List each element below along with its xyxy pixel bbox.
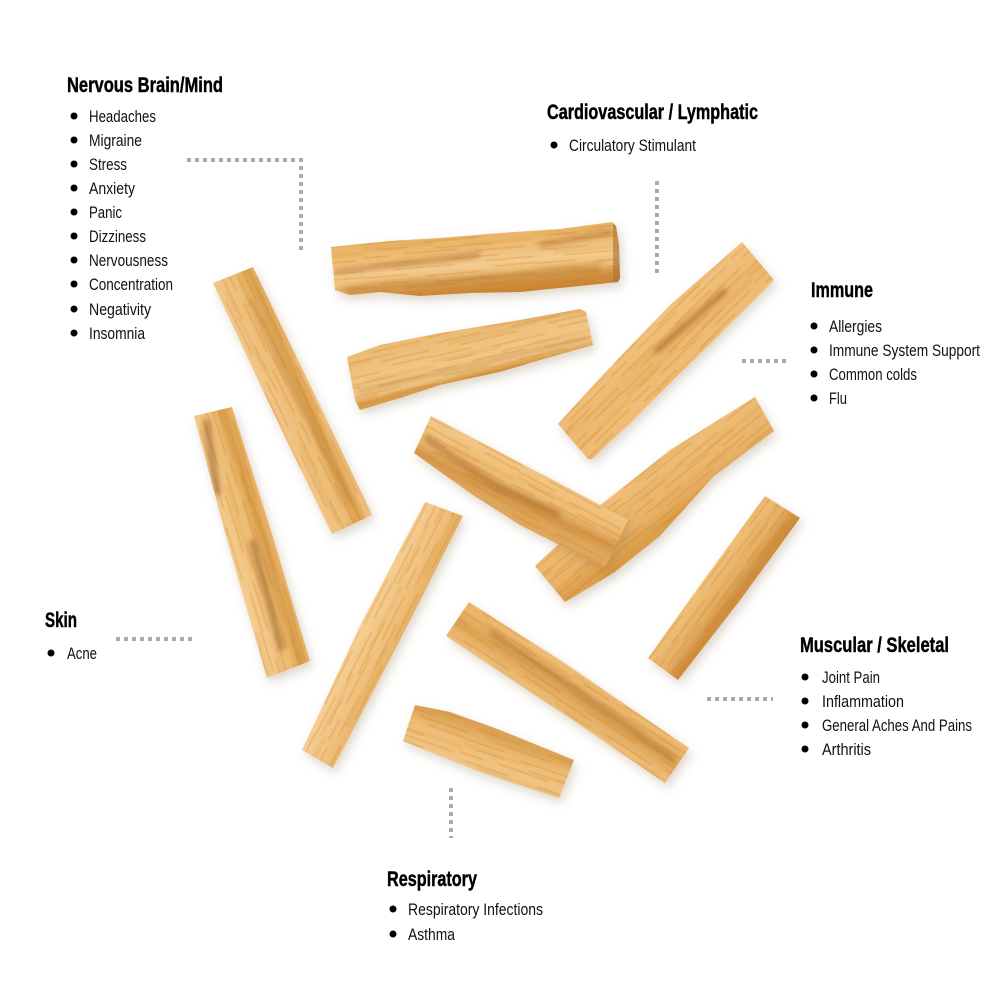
- panel: cardiovascular: [547, 101, 758, 155]
- list: immune: [810, 317, 980, 408]
- list: nervous: Migraine: [89, 131, 142, 150]
- list: nervous: Concentration: [89, 275, 173, 294]
- stick: far right: [640, 490, 805, 685]
- list: cardiovascular: Circulatory Stimulant: [569, 136, 696, 155]
- list: nervous: Nervousness: [89, 251, 168, 270]
- panel: respiratory: [387, 868, 543, 944]
- list: nervous: Panic: [89, 203, 122, 222]
- list: respiratory: Respiratory Infections: [408, 900, 543, 919]
- stick: centre long: [295, 495, 470, 775]
- stick: bottom: [398, 700, 578, 802]
- list: respiratory: [390, 900, 543, 944]
- list: immune: Allergies: [829, 317, 882, 336]
- connector: respiratory: [449, 788, 453, 838]
- heading: cardiovascular: Cardiovascular / Lymphatic: [547, 101, 758, 124]
- connector: skin: [116, 637, 196, 641]
- list: immune: Common colds: [829, 365, 917, 384]
- stick: lower left: [190, 400, 315, 685]
- heading: immune: Immune: [811, 279, 873, 302]
- list: nervous: [70, 107, 173, 343]
- connector: immune: [742, 359, 786, 363]
- heading: respiratory: Respiratory: [387, 868, 477, 891]
- heading: skin: Skin: [45, 609, 77, 632]
- list: nervous: Negativity: [89, 300, 151, 319]
- list: immune: Flu: [829, 389, 847, 408]
- stick: lower right: [440, 595, 695, 790]
- heading: nervous: Nervous Brain/Mind: [67, 74, 223, 97]
- panel: nervous brain/mind: [67, 74, 223, 343]
- list: muscular: Joint Pain: [822, 668, 880, 687]
- connector: muscular: [707, 697, 773, 701]
- list: nervous: Insomnia: [89, 324, 145, 343]
- stick: upper left: [205, 260, 380, 540]
- stick: upper right diagonal: [550, 235, 780, 465]
- panel: skin: [45, 609, 97, 663]
- list: nervous: Anxiety: [89, 179, 135, 198]
- list: skin: Acne: [67, 644, 97, 663]
- connector: nervous: [187, 160, 301, 250]
- list: respiratory: Asthma: [408, 925, 455, 944]
- stick: centre: [410, 410, 635, 575]
- list: nervous: Headaches: [89, 107, 156, 126]
- stick: second horizontal: [340, 300, 600, 415]
- list: muscular: [802, 668, 972, 759]
- heading: muscular: Muscular / Skeletal: [800, 634, 949, 657]
- stick: top horizontal: [320, 215, 630, 305]
- list: muscular: Arthritis: [822, 740, 871, 759]
- connector: cardiovascular: [655, 181, 659, 274]
- stick: middle right diagonal: [530, 390, 780, 605]
- panel: immune: [810, 279, 980, 408]
- list: muscular: Inflammation: [822, 692, 904, 711]
- list: nervous: Stress: [89, 155, 127, 174]
- panel: muscular / skeletal: [800, 634, 972, 759]
- list: nervous: Dizziness: [89, 227, 146, 246]
